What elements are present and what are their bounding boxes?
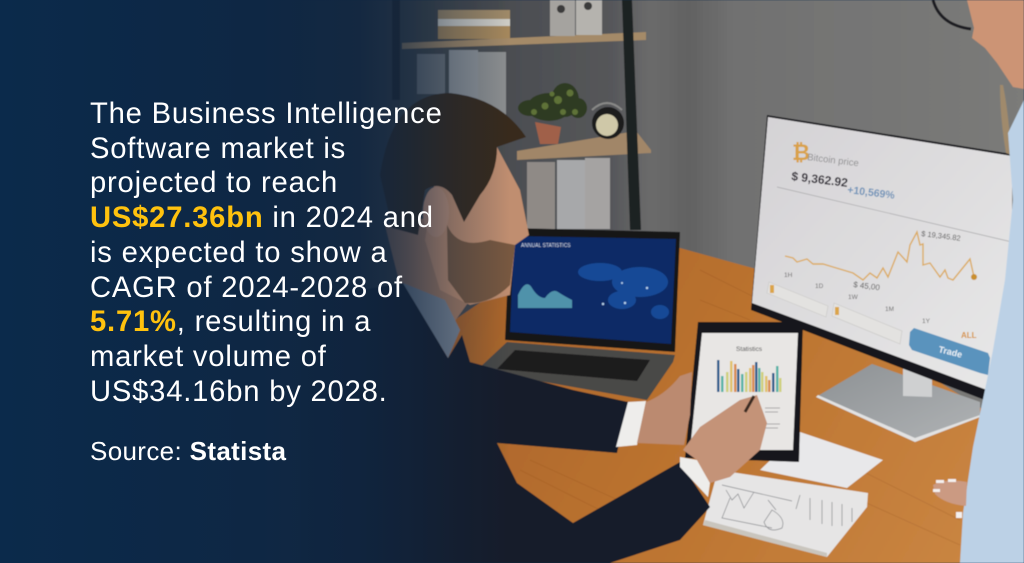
price line chart: $ 45,00 — [853, 280, 881, 292]
right cuff — [680, 457, 710, 497]
price line chart: $ 19,345.82 — [921, 229, 961, 243]
right hand — [683, 395, 767, 483]
monitor with stand — [751, 115, 1012, 442]
face — [425, 147, 529, 305]
time range labels: 1W — [848, 294, 859, 301]
price line chart — [785, 229, 977, 292]
tablet bars — [717, 360, 782, 392]
suit — [300, 283, 710, 563]
woman at right: face, glasses, hand, shirt — [933, 0, 1024, 563]
shelves with books, binders, plant and clock — [392, 0, 651, 230]
main statement text — [90, 98, 443, 408]
bitcoin price header: ₿ — [792, 140, 810, 165]
main statement text: projected to reach — [90, 167, 338, 199]
time range labels: 1Y — [922, 318, 931, 325]
desk — [440, 248, 1000, 563]
bitcoin price header: +10,569% — [847, 184, 896, 202]
trade button — [909, 328, 990, 375]
bitcoin price header: Bitcoin price — [807, 152, 859, 169]
tablet with statistics bar chart — [685, 322, 803, 462]
bitcoin price header — [791, 140, 896, 202]
laptop with dashboard screen — [477, 228, 680, 400]
bitcoin price header: $ 9,362.92 — [791, 169, 849, 190]
main statement text: market volume of — [90, 341, 327, 373]
main statement text: US$34.16bn by 2028. — [90, 376, 388, 408]
trade button: Trade — [938, 344, 963, 360]
main statement text: The Business Intelligence — [90, 98, 443, 130]
source line: Source: Statista — [90, 436, 286, 466]
main statement text: 5.71%, resulting in a — [90, 306, 371, 338]
hair — [380, 93, 526, 235]
neck — [385, 215, 470, 335]
main statement text: is expected to show a — [90, 237, 388, 269]
beard — [447, 225, 515, 303]
time range labels — [784, 272, 977, 340]
ear — [423, 187, 449, 237]
time range labels: 1D — [815, 283, 824, 290]
left hand — [637, 372, 692, 445]
time range labels: ALL — [961, 331, 977, 340]
laptop with dashboard screen: ANNUAL STATISTICS — [521, 243, 571, 249]
navy gradient overlay — [0, 0, 510, 563]
shirt collar — [403, 283, 460, 358]
time range labels: 1H — [784, 272, 793, 279]
papers and notebook — [703, 432, 883, 557]
main statement text: CAGR of 2024-2028 of — [90, 272, 403, 304]
man: head, suit, hands — [300, 93, 767, 563]
wallet cards — [767, 282, 902, 344]
tablet with statistics bar chart: Statistics — [736, 346, 763, 353]
pen — [745, 396, 754, 412]
main statement text: US$27.36bn in 2024 and — [90, 202, 434, 234]
time range labels: 1M — [885, 306, 894, 313]
left cuff — [616, 401, 646, 447]
main statement text: Software market is — [90, 133, 346, 165]
